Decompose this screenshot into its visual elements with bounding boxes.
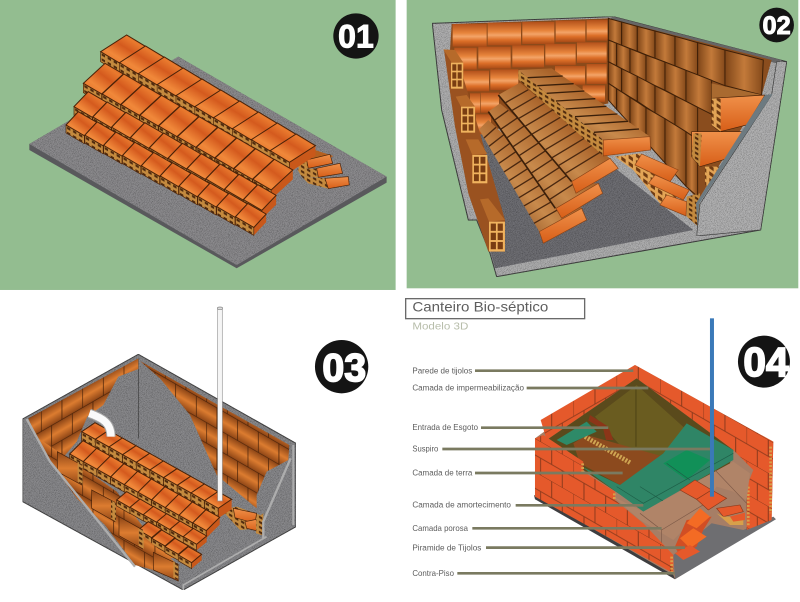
front wall of red brick [535, 435, 673, 573]
pyramid third row bricks [488, 103, 603, 218]
badge 03: 03 [322, 346, 366, 390]
damping layer in green [557, 422, 733, 512]
green background [407, 0, 798, 288]
badge 01: 01 [338, 18, 374, 54]
sewage pipe elbow [89, 413, 111, 437]
label: wall: Parede de tijolos [412, 366, 472, 376]
title box [406, 298, 585, 319]
title box: Canteiro Bio-séptico [412, 298, 549, 314]
brick pyramid front steps [675, 480, 745, 560]
concrete wedge edges [27, 419, 293, 590]
small rear brick steps [297, 148, 349, 189]
panel 01: laid brick pyramid on slab [0, 0, 396, 290]
brick row 4 [66, 112, 266, 235]
label: porous: Camada porosa [412, 523, 468, 533]
labels [412, 366, 524, 578]
pyramid rear steps with hollow ends [615, 153, 689, 216]
brick row 1 (top) [101, 35, 315, 172]
label: soil: Camada de terra [412, 468, 473, 478]
right concrete wedge [696, 62, 787, 236]
label: pyramid: Piramide de Tijolos [412, 542, 481, 552]
back wall bricks [450, 18, 608, 134]
grey concrete box [23, 354, 296, 590]
leader lines [442, 371, 710, 573]
panel 02: brick chamber with stepped pyramid [407, 0, 798, 288]
concrete slab [29, 57, 387, 268]
badge 03 [315, 340, 368, 393]
inner floor [673, 517, 776, 579]
stair row 2 [70, 441, 220, 538]
rear small steps [222, 507, 263, 536]
label: vent: Suspiro [412, 444, 439, 454]
back right wall [635, 365, 773, 530]
model backdrop [535, 365, 773, 579]
label: damping: Camada de amortecimento [412, 499, 511, 509]
porous layer [613, 462, 750, 547]
pyramid second row bricks [498, 83, 618, 193]
right wall bricks [608, 18, 772, 200]
left wedge bricks [38, 438, 178, 581]
brick row 2 [83, 63, 293, 199]
slab [534, 495, 675, 579]
left wall brick column [443, 49, 505, 252]
label: waterproofing: Camada de impermeabilização [412, 382, 524, 392]
stair row 4 [138, 522, 202, 569]
badge 01 [333, 13, 379, 59]
soil mound [595, 385, 690, 485]
badge 04: 04 [743, 339, 789, 385]
bricks beneath the stair rows [70, 458, 177, 558]
vent pipe [217, 307, 223, 501]
waterproofing layer [547, 378, 733, 510]
panel 04: labelled 3D model [406, 298, 790, 579]
badge 02: 02 [763, 12, 791, 40]
left back wall bricks [28, 358, 138, 465]
outer concrete shell [432, 17, 787, 277]
pyramid top row bricks [518, 68, 651, 156]
badge 02 [759, 8, 794, 42]
brick row 3 [74, 92, 276, 219]
blue vent pipe [710, 318, 714, 497]
soil layer [573, 415, 663, 485]
stair row 1 with hollow ends [82, 423, 232, 518]
subtitle: Modelo 3D [412, 321, 468, 332]
label: sewage inlet: Entrada de Esgoto [412, 422, 478, 432]
label: subfloor: Contra-Piso [412, 568, 454, 578]
panel 03: chamber with vent and sewage pipes [23, 307, 368, 590]
stair row 3 [117, 492, 207, 550]
right back wall bricks [140, 361, 289, 508]
pyramid fourth row bricks [479, 120, 587, 243]
back left wall [541, 365, 637, 440]
green background [0, 0, 396, 290]
right wall front bricks [687, 83, 765, 227]
concrete floor [478, 133, 693, 268]
